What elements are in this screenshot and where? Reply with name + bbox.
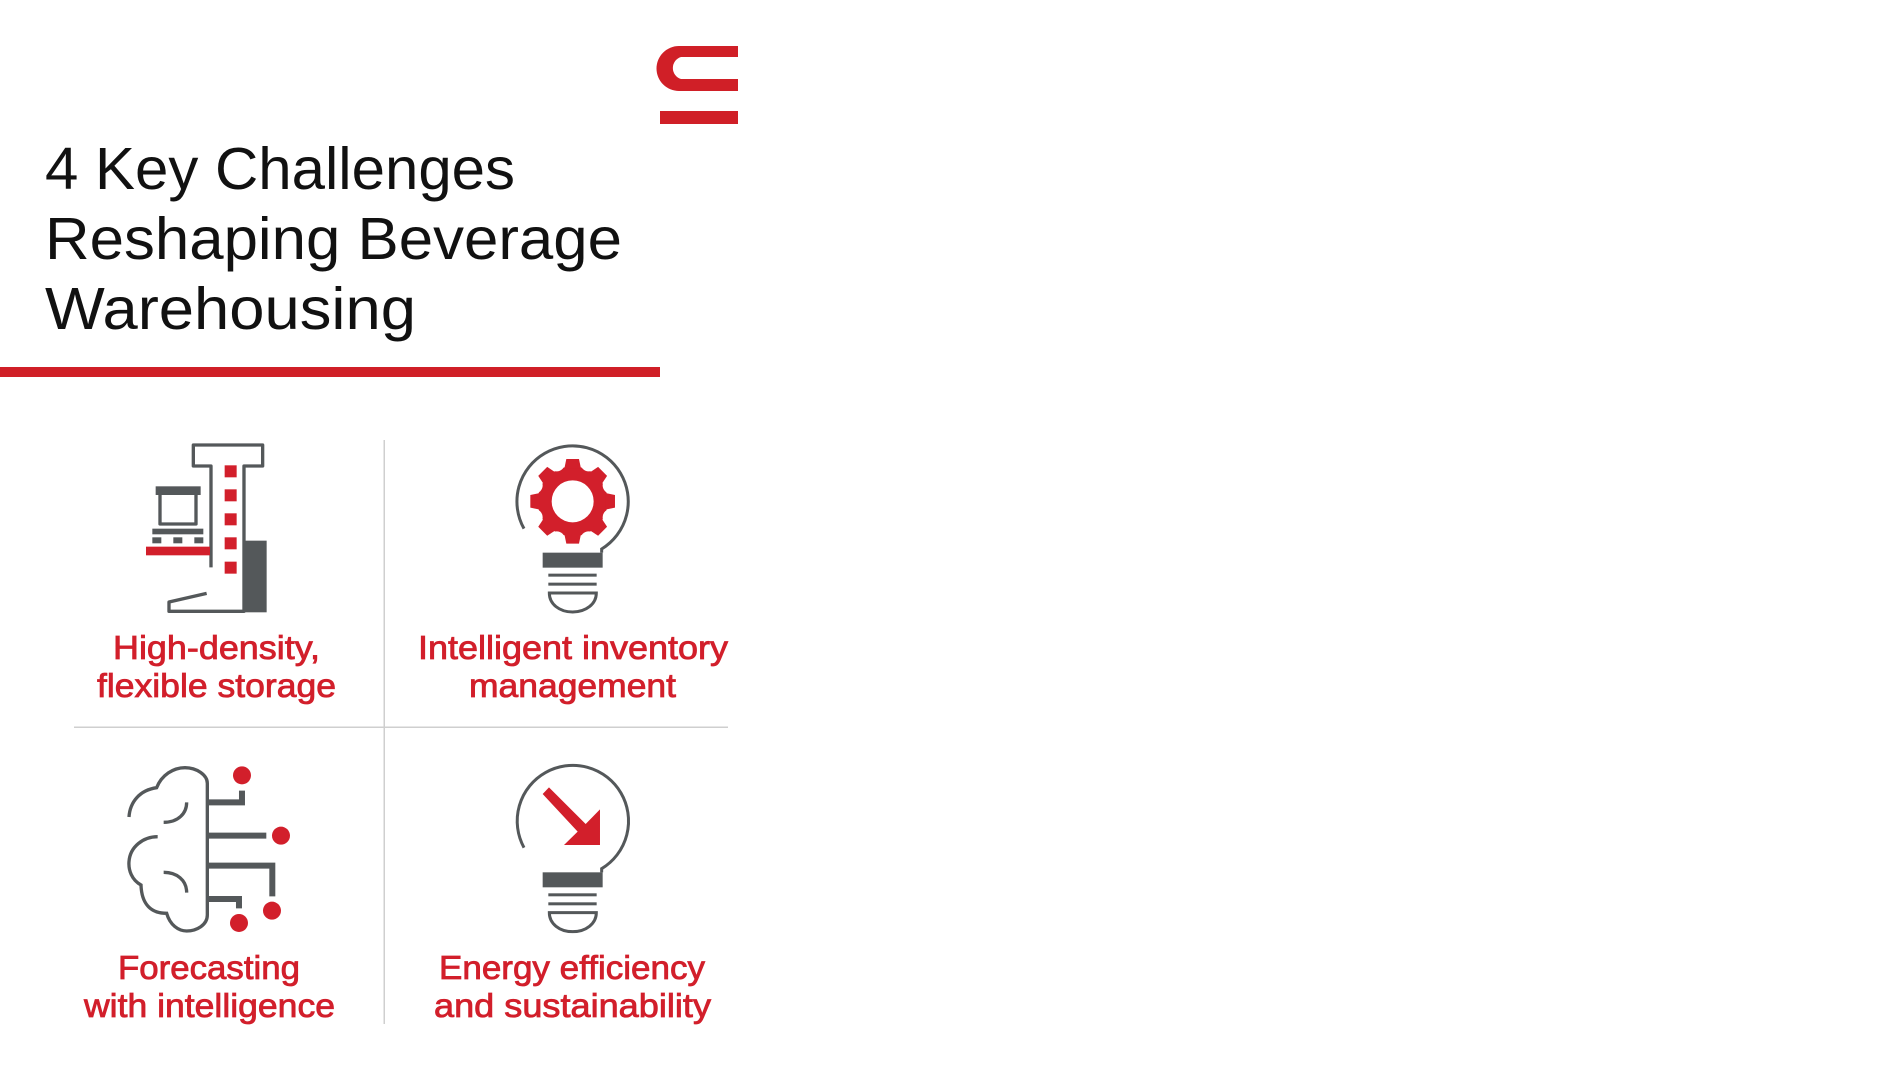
label: forecasting (83, 949, 335, 1024)
panel: high-density storage (97, 445, 336, 704)
label: energy efficiency: and sustainability (434, 987, 712, 1024)
title (45, 136, 622, 342)
title underline (0, 367, 660, 377)
label: intelligent inventory: management (469, 667, 676, 704)
panel: intelligent inventory (418, 446, 729, 704)
title: Reshaping Beverage (45, 206, 622, 272)
title: Warehousing (45, 276, 416, 342)
label: energy efficiency (434, 949, 712, 1024)
panel: forecasting (83, 766, 335, 1024)
icon: bulb with gear (517, 446, 628, 612)
grid dividers (74, 440, 728, 1024)
label: high-density storage: flexible storage (97, 667, 336, 704)
label: high-density storage: High-density, (113, 629, 320, 666)
label: intelligent inventory (418, 629, 729, 704)
label: forecasting: Forecasting (118, 949, 300, 986)
panel: energy efficiency (434, 765, 712, 1024)
label: high-density storage (97, 629, 336, 704)
icon: brain with circuit (129, 766, 290, 932)
icon: bulb with down arrow (517, 765, 629, 932)
icon: warehouse racking lift (146, 445, 267, 612)
label: energy efficiency: Energy efficiency (439, 949, 706, 986)
logo (656, 46, 738, 124)
label: intelligent inventory: Intelligent inventory (418, 629, 729, 666)
title: 4 Key Challenges (45, 136, 515, 202)
label: forecasting: with intelligence (83, 987, 335, 1024)
